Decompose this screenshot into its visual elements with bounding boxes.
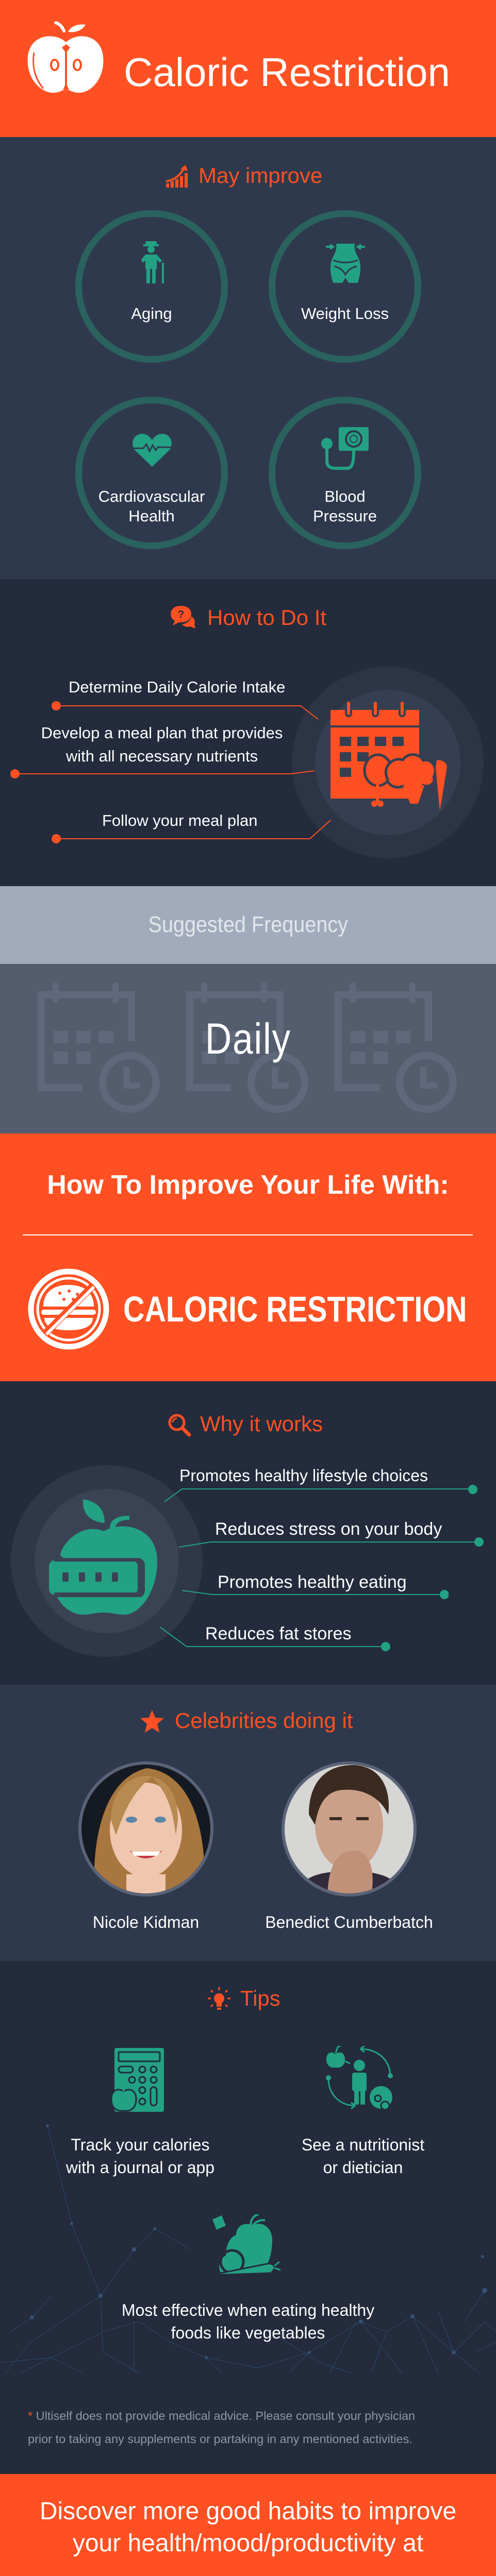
disclaimer [28,2404,471,2451]
text: daily: Daily [205,1014,291,1063]
text: discover more [0,2496,496,2560]
title: Caloric Restriction [124,49,450,95]
heading: tips [208,1986,280,2010]
connector [52,820,331,843]
illustration: apple scale in circles [11,1465,203,1657]
tip: track calories [66,2048,214,2177]
icon: apple core [28,21,103,93]
reason 3 [181,1572,449,1599]
text [93,2299,403,2344]
icon: waist [326,244,365,283]
text: Determine Daily Calorie Intake [69,678,285,696]
label: nicole kidman: Nicole Kidman [93,1913,199,1931]
reason 1 [164,1466,477,1502]
illustration: concentric circles with calendar and vegetables [292,667,484,858]
icon: rising chart [166,165,188,188]
heading: may improve: May improve [199,163,322,188]
label: Health [128,507,175,525]
text: foods like vegetables [171,2324,325,2342]
text: Most effective when eating healthy [122,2301,374,2319]
label [313,487,377,525]
connector [10,769,315,778]
reason 1: Promotes healthy lifestyle choices [179,1466,428,1485]
text [66,2136,214,2177]
text: with a journal or app [66,2158,214,2177]
panel: daily [0,964,496,1133]
icon: magnifier [168,1414,191,1436]
heading: How To Improve Your Life With: [47,1170,449,1200]
label: Weight Loss [301,304,389,323]
step 2 [10,724,315,778]
reason 2 [178,1519,484,1548]
text: Follow your meal plan [102,811,258,829]
icon: question bubbles: ? [178,609,184,620]
icon: no burger [28,1268,109,1350]
tip: see a nutritionist [302,2046,424,2177]
photo: benedict cumberbatch [282,1761,417,1896]
reason 4 [160,1624,390,1651]
heading: Suggested Frequency [148,912,348,937]
panel: why it works [0,1381,496,1685]
reason 2: Reduces stress on your body [215,1519,442,1539]
heading: why it works: Why it works [200,1412,323,1436]
icon: star [140,1710,164,1733]
icon: nutritionist cycle [324,2046,395,2113]
text: discover more: Discover more good habits to improve [40,2498,456,2525]
reason 4: Reduces fat stores [205,1624,351,1643]
label: benedict cumberbatch: Benedict Cumberbatch [265,1913,433,1931]
label: Aging [131,304,172,323]
benefit: cardiovascular health [75,397,228,549]
text: See a nutritionist [302,2136,424,2154]
heading: celebrities doing it: Celebrities doing it [175,1708,353,1733]
step 1 [52,678,319,720]
text: with all necessary nutrients [66,747,258,765]
icon: vegetables [210,2214,280,2275]
icon: calculator with apple [112,2048,164,2112]
disclaimer: prior to taking any supplements or partaking in any mentioned activities. [28,2432,412,2446]
benefit: aging [75,210,228,363]
label: Cardiovascular [98,487,205,505]
text: or dietician [323,2158,403,2177]
icon: old man [141,241,164,283]
label [98,487,205,525]
tip: eat vegetables [93,2211,403,2348]
panel: tips [0,1961,496,2474]
text [275,2133,451,2179]
benefit: blood pressure [269,397,421,549]
icon: calendar with vegetables [330,701,447,811]
icons: faded calendars [38,982,457,1113]
connector [52,701,319,720]
step 3 [52,811,331,843]
background: network pattern [0,2124,496,2373]
text: discover more: your health/mood/productivity at [73,2530,423,2557]
icon: apple with scale [49,1499,157,1615]
panel: may improve [0,137,496,579]
icon: blood pressure monitor [321,427,369,470]
text [41,724,283,765]
heading: tips: Tips [240,1986,280,2010]
benefit: weight loss [269,210,421,363]
label: Pressure [313,507,377,525]
panel: suggested frequency [0,886,496,964]
banner: how to improve your life with [0,1133,496,1381]
panel: how to do it [0,579,496,886]
panel: call to action [0,2474,496,2576]
icon: heart with pulse [133,434,172,467]
photo: nicole kidman [78,1761,213,1896]
disclaimer: * Ultiself does not provide medical advice. Please consult your physician [28,2409,415,2422]
icon: light bulb [208,1987,230,2010]
header band [0,0,496,137]
icon: question bubbles [171,606,195,629]
reason 3: Promotes healthy eating [218,1572,407,1592]
label: Blood [324,487,366,505]
title: caloric restriction: CALORIC RESTRICTION [123,1289,467,1329]
text: Develop a meal plan that provides [41,724,283,742]
text: Track your calories [71,2136,210,2154]
heading: how to do it: How to Do It [207,605,326,630]
panel: celebrities [0,1685,496,1961]
